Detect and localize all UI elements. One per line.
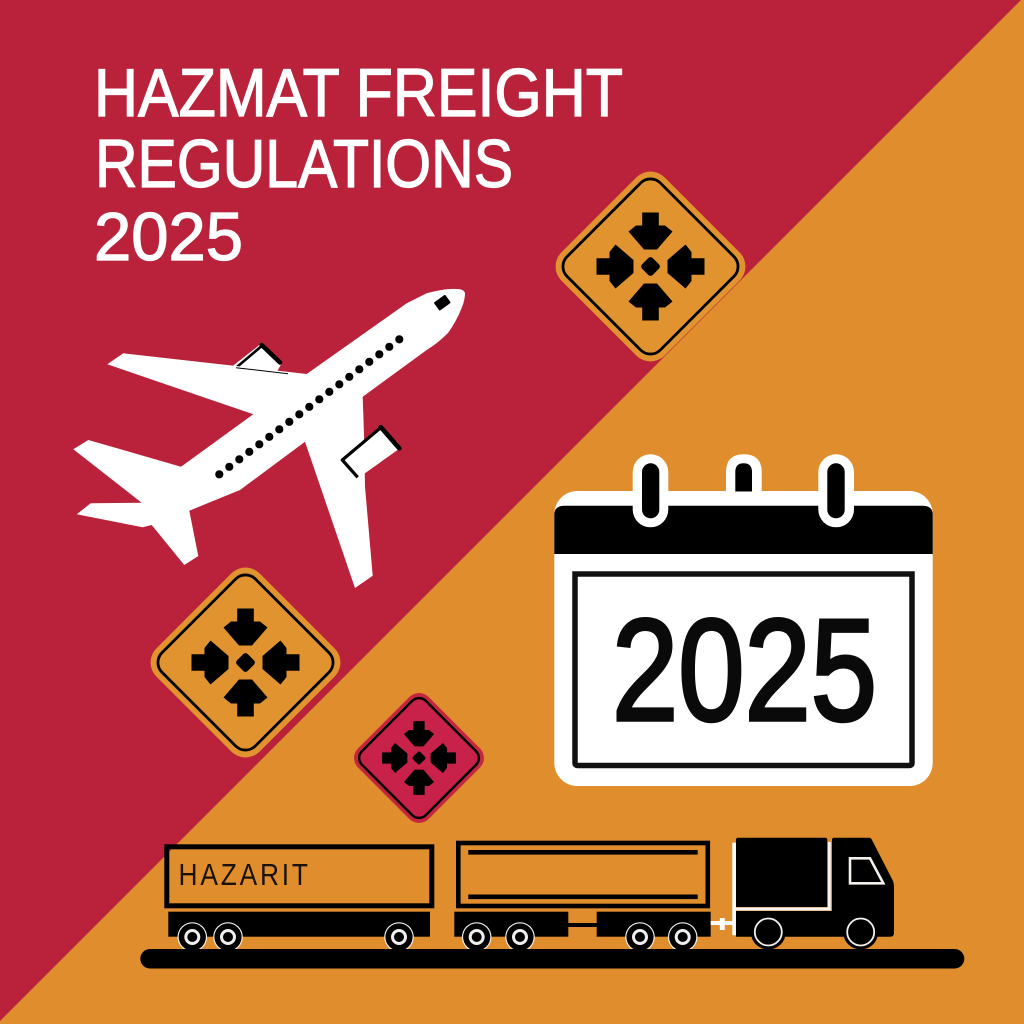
icon: hazard sign left (142, 559, 349, 766)
icon: hazard sign small red (348, 687, 490, 829)
road (140, 949, 964, 968)
truck (736, 838, 894, 950)
title: REGULATIONS (95, 126, 513, 202)
title: HAZMAT FREIGHT (94, 55, 623, 131)
title (94, 55, 623, 275)
title: 2025 (94, 199, 243, 275)
icon: airplane (73, 289, 465, 588)
trailer: hazarit (167, 847, 432, 952)
icon: hazard sign top (547, 163, 754, 370)
icon: calendar (554, 454, 933, 786)
trailer label: HAZARIT (178, 858, 311, 893)
hitch connector (711, 843, 736, 935)
truck wheels (751, 914, 878, 950)
trailer: plain (454, 843, 711, 952)
calendar year: 2025 (612, 589, 877, 751)
